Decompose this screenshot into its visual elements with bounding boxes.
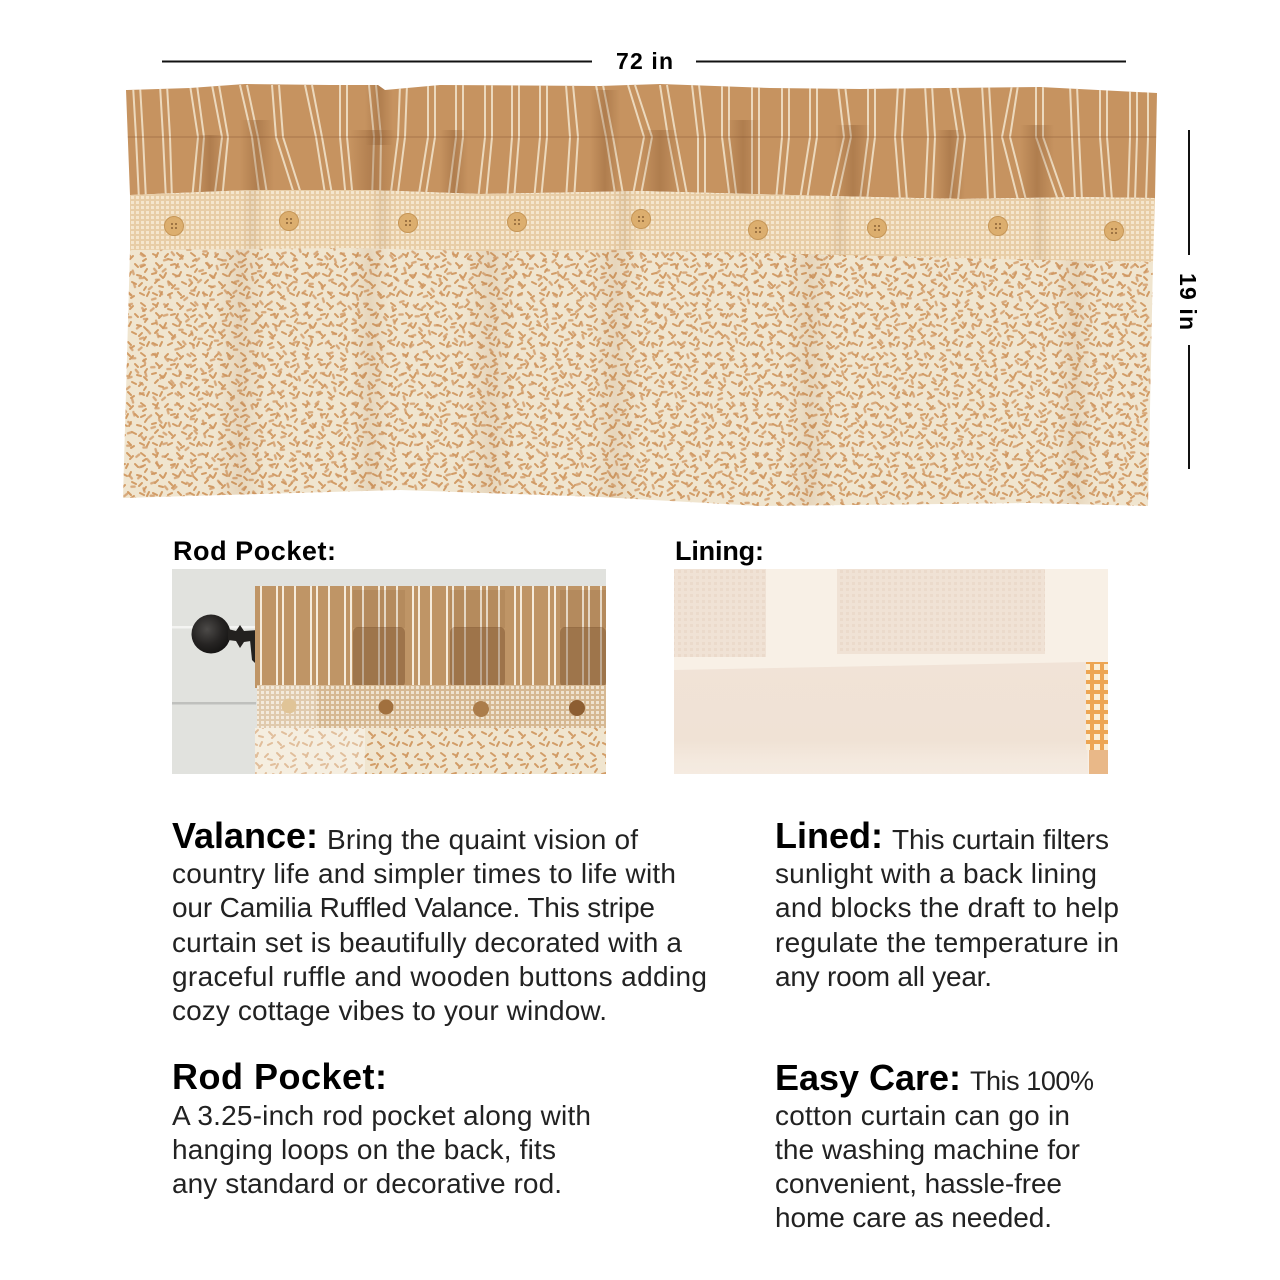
- text block: Valance: [172, 815, 707, 1026]
- body: Valance: curtain set is beautifully decorated with a: [172, 927, 682, 958]
- heading: Easy Care: Easy Care:: [775, 1057, 961, 1098]
- width dimension: 72 in: 72 in: [616, 48, 673, 74]
- floral lower panel: [120, 245, 1160, 510]
- text block: Rod Pocket: [172, 1056, 591, 1199]
- label: Rod Pocket: Rod Pocket:: [173, 536, 336, 566]
- body: Rod Pocket: hanging loops on the back, fits: [172, 1134, 556, 1165]
- heading: Rod Pocket: Rod Pocket:: [172, 1056, 387, 1097]
- lining centre patch: [837, 569, 1045, 654]
- body: Lined: and blocks the draft to help: [775, 892, 1119, 923]
- body: Easy Care: This 100%: [970, 1066, 1094, 1096]
- heading: Valance: Valance:: [172, 815, 318, 856]
- wall background: [172, 569, 606, 774]
- floral band: [255, 728, 606, 774]
- buttons: [282, 698, 585, 717]
- body: Easy Care: the washing machine for: [775, 1134, 1080, 1165]
- lining left patch: [674, 569, 766, 657]
- curtain rod and finial: [192, 614, 258, 665]
- body: Lined: [775, 824, 1119, 992]
- lining lower panel: [674, 662, 1088, 774]
- body: Easy Care: cotton curtain can go in: [775, 1100, 1070, 1131]
- body: Easy Care: convenient, hassle-free: [775, 1168, 1062, 1199]
- body: Lined: regulate the temperature in: [775, 927, 1119, 958]
- floral edge: [1089, 750, 1108, 774]
- text block: Lined: [775, 815, 1119, 992]
- heading: Lined: Lined:: [775, 815, 883, 856]
- stripe heading: [255, 586, 606, 688]
- height dimension: 19 in: 19 in: [1175, 273, 1201, 330]
- body: Easy Care: [775, 1066, 1094, 1233]
- label: Lining: Lining:: [675, 536, 764, 566]
- body: Lined: This curtain filters: [892, 824, 1109, 855]
- body: Valance: cozy cottage vibes to your window.: [172, 995, 607, 1026]
- gingham band: [257, 685, 606, 730]
- body: Rod Pocket: A 3.25-inch rod pocket along with: [172, 1100, 591, 1131]
- text block: Easy Care: [775, 1057, 1094, 1233]
- body: Rod Pocket: any standard or decorative rod.: [172, 1168, 562, 1199]
- body: Valance: Bring the quaint vision of: [327, 824, 638, 855]
- body: Valance: our Camilia Ruffled Valance. This stripe: [172, 892, 655, 923]
- body: Rod Pocket: [172, 1100, 591, 1199]
- gingham button band: [130, 190, 1155, 262]
- body: Valance: graceful ruffle and wooden buttons adding: [172, 961, 707, 992]
- valance photo: [120, 80, 1165, 510]
- lining photo: [674, 569, 1108, 774]
- body: Valance: country life and simpler times to life with: [172, 858, 676, 889]
- lining base: [674, 569, 1108, 774]
- body: Lined: any room all year.: [775, 961, 992, 992]
- body: Valance: [172, 824, 707, 1026]
- ruffle stripe band: [120, 80, 1165, 205]
- wooden buttons: [164, 210, 1124, 240]
- orange gingham edge: [1086, 662, 1108, 750]
- body: Easy Care: home care as needed.: [775, 1202, 1052, 1233]
- body: Lined: sunlight with a back lining: [775, 858, 1097, 889]
- rod pocket photo: [172, 569, 606, 774]
